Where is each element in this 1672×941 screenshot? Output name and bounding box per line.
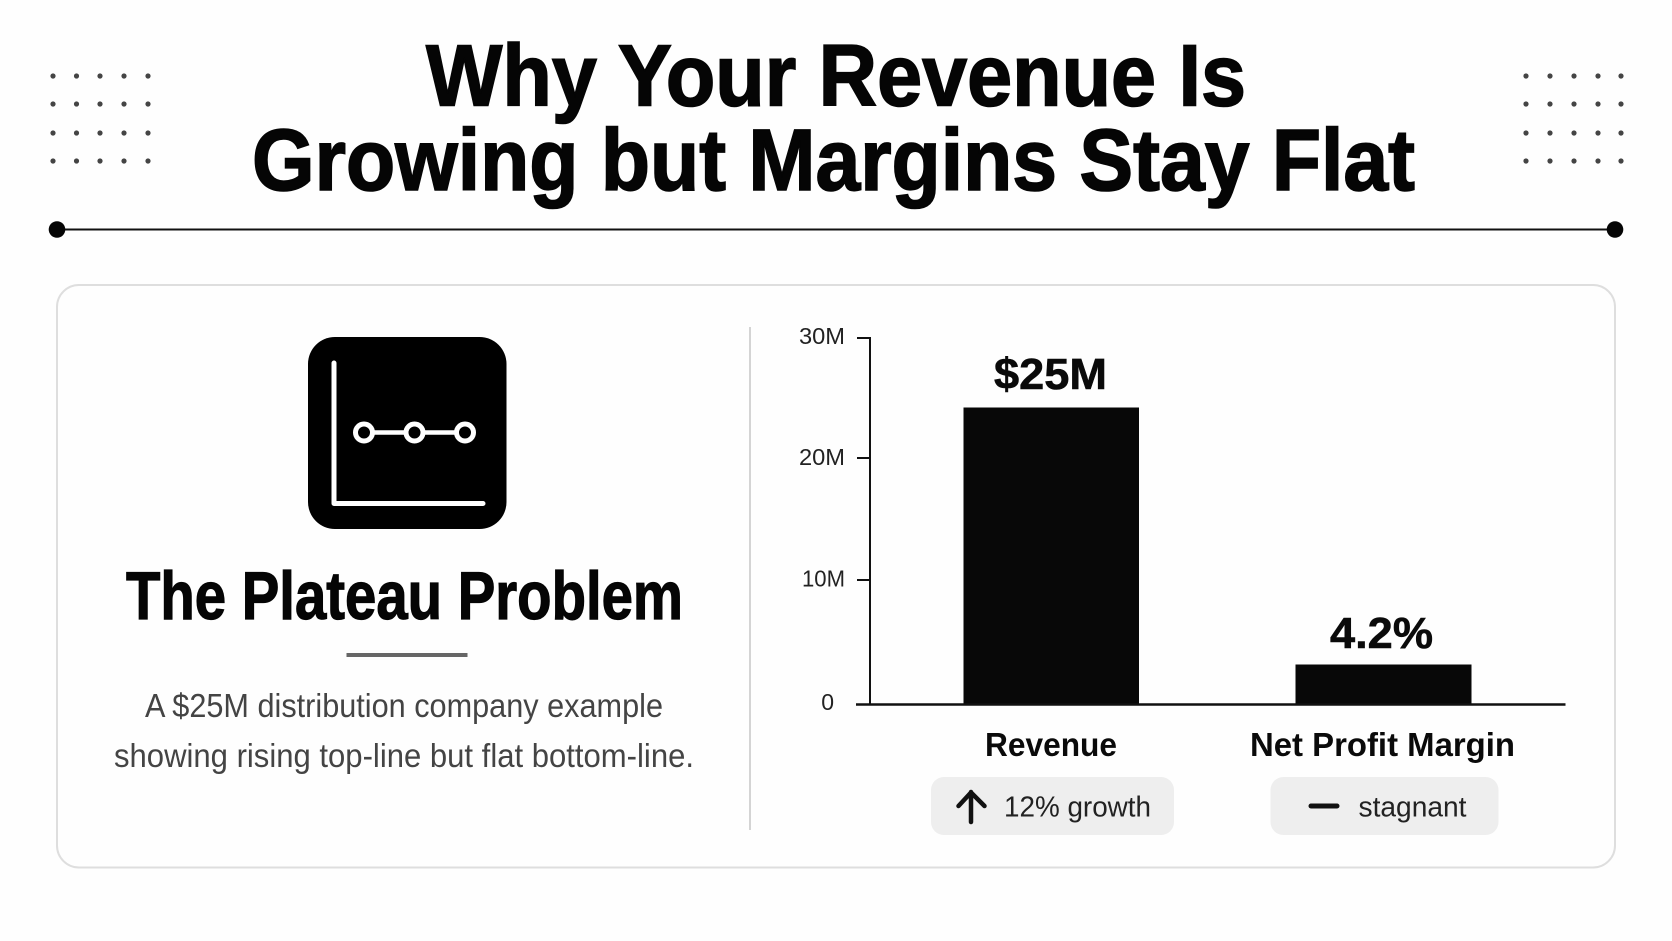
x axis baseline: [856, 703, 1566, 706]
title: Growing but Margins Stay Flat: [252, 112, 1415, 209]
badge: 12% growth: [931, 777, 1174, 835]
y axis labels: 10M: [802, 566, 845, 592]
bar: net profit margin: [1296, 664, 1472, 704]
badge: stagnant: stagnant: [1358, 792, 1466, 824]
description text: A $25M distribution company example: [145, 687, 663, 724]
category label: revenue: Revenue: [985, 726, 1117, 763]
icon: flat line chart: [308, 337, 506, 529]
y axis labels: 20M: [799, 444, 845, 470]
icon: right dot grid decoration: [1523, 73, 1624, 164]
panel: main card: [57, 285, 1615, 868]
heading: the plateau problem: The Plateau Problem: [126, 558, 683, 634]
panel: left summary: [114, 337, 694, 774]
y axis with ticks: [857, 338, 870, 704]
value label: 4.2%: 4.2%: [1330, 609, 1433, 658]
vertical divider between columns: [749, 327, 751, 830]
badge: 12% growth: 12% growth: [1004, 792, 1151, 824]
value label: $25M: $25M: [994, 350, 1107, 399]
description text: [114, 687, 694, 774]
header rule with end dots: [49, 221, 1623, 238]
title: Why Your Revenue Is: [426, 28, 1246, 124]
short divider under heading: [346, 653, 468, 657]
description text: showing rising top-line but flat bottom-line.: [114, 737, 694, 774]
bar chart: revenue vs net profit margin: [799, 323, 1566, 835]
badge: stagnant: [1270, 777, 1498, 835]
bar: revenue: [964, 408, 1139, 704]
title: [252, 28, 1415, 209]
category label: net profit margin: Net Profit Margin: [1250, 726, 1515, 763]
y axis labels: 30M: [799, 323, 845, 349]
icon: left dot grid decoration: [50, 73, 151, 164]
y axis labels: [799, 323, 845, 715]
y axis labels: 0: [821, 689, 834, 715]
